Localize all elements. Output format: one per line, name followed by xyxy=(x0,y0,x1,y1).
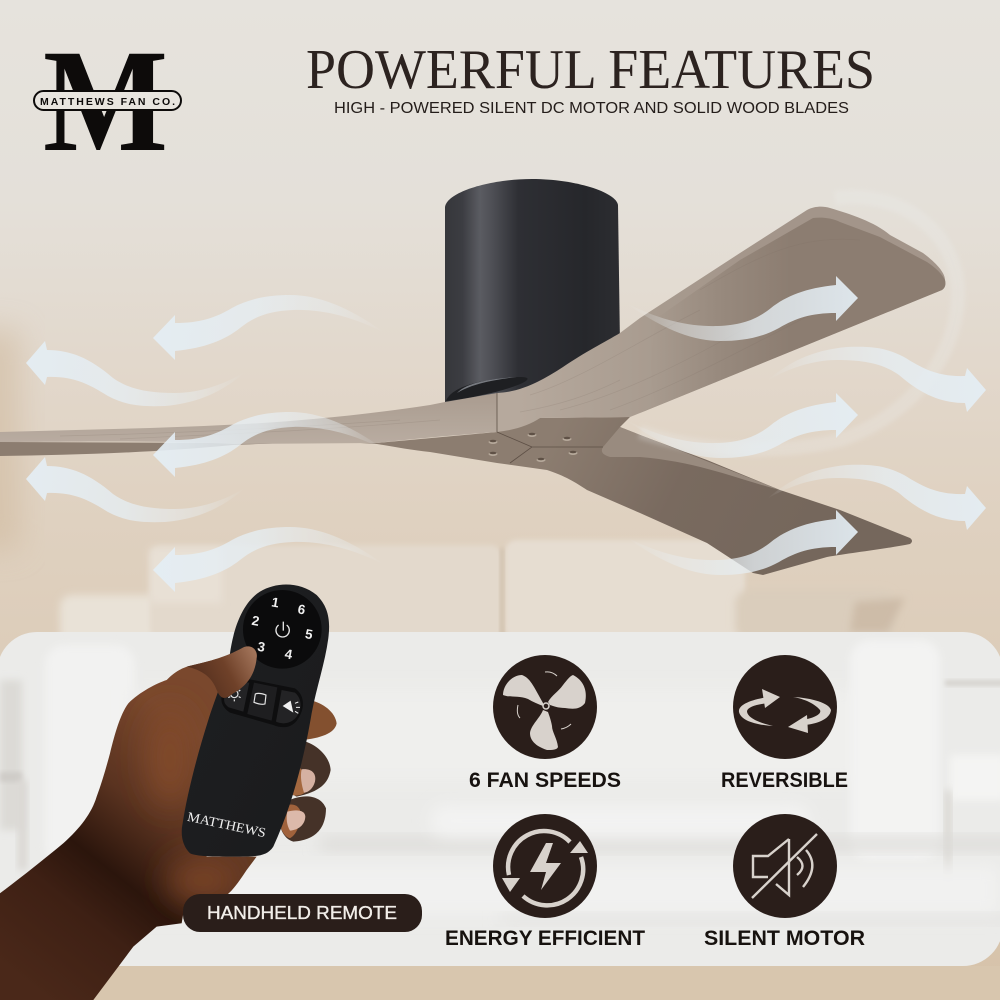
feature: reversible xyxy=(721,655,848,792)
fan motor housing xyxy=(445,179,620,402)
fingers behind remote xyxy=(279,700,337,842)
arrow right 2 xyxy=(767,347,986,412)
handheld remote label pill xyxy=(183,894,422,932)
logo: MATTHEWS FAN CO. xyxy=(40,96,175,108)
thumb xyxy=(187,646,257,698)
dial numbers: 4 xyxy=(284,646,294,662)
remote brand: MATTHEWS xyxy=(186,809,267,840)
hub seam and screws xyxy=(488,393,603,463)
handheld remote label pill: HANDHELD REMOTE xyxy=(207,902,397,923)
arrow right 1 xyxy=(626,276,858,341)
label: silent motor: SILENT MOTOR xyxy=(704,927,865,950)
logo: M xyxy=(43,19,168,182)
airflow arrows left xyxy=(26,295,385,592)
mode icon glyphs xyxy=(228,687,266,704)
label: energy efficient: ENERGY EFFICIENT xyxy=(445,927,645,950)
dial numbers: 3 xyxy=(256,639,266,655)
wood grain xyxy=(60,239,860,439)
lower blade light edge xyxy=(602,427,780,490)
motor base highlight xyxy=(446,377,528,401)
arrow right 4 xyxy=(767,465,986,530)
icon: energy bolt xyxy=(493,814,597,918)
label: reversible: REVERSIBLE xyxy=(721,769,848,792)
dial xyxy=(243,590,322,669)
remote body xyxy=(182,585,329,857)
arrow left 5 xyxy=(153,527,385,592)
arrow left 1 xyxy=(153,295,385,360)
icon: fan xyxy=(493,655,597,759)
button group xyxy=(221,678,303,727)
feature: energy efficient xyxy=(445,814,645,950)
arrow left 4 xyxy=(26,457,245,522)
arrow right 5 xyxy=(626,510,858,575)
arrow right 3 xyxy=(626,393,858,458)
hub and lower right blade xyxy=(0,417,912,575)
arrow left 3 xyxy=(153,412,385,477)
left blade xyxy=(0,393,497,444)
hand holding remote xyxy=(0,585,337,1000)
airflow arrows right xyxy=(626,276,986,575)
feature: silent motor xyxy=(704,814,865,950)
label: 6 fan speeds: 6 FAN SPEEDS xyxy=(469,769,621,792)
dial numbers xyxy=(251,594,314,662)
title: POWERFUL FEATURES xyxy=(306,39,875,101)
icon: muted speaker xyxy=(733,814,837,918)
hand shading xyxy=(147,707,240,903)
ceiling fan xyxy=(0,179,945,575)
power icon xyxy=(276,622,289,637)
frosted panel xyxy=(0,632,1000,966)
dial numbers: 1 xyxy=(270,594,281,611)
arm and palm xyxy=(0,647,257,1000)
feature: 6 fan speeds xyxy=(469,655,621,792)
upper right blade xyxy=(497,207,945,432)
airflow swirl xyxy=(640,197,958,449)
subtitle: HIGH - POWERED SILENT DC MOTOR AND SOLID WOOD BLADES xyxy=(334,100,849,117)
upper blade darker tip face xyxy=(640,218,945,413)
arrow left 2 xyxy=(26,341,245,406)
dial numbers: 2 xyxy=(251,613,261,629)
dial numbers: 6 xyxy=(297,601,307,618)
dial numbers: 5 xyxy=(304,626,314,642)
icon: reverse arrows xyxy=(733,655,837,759)
